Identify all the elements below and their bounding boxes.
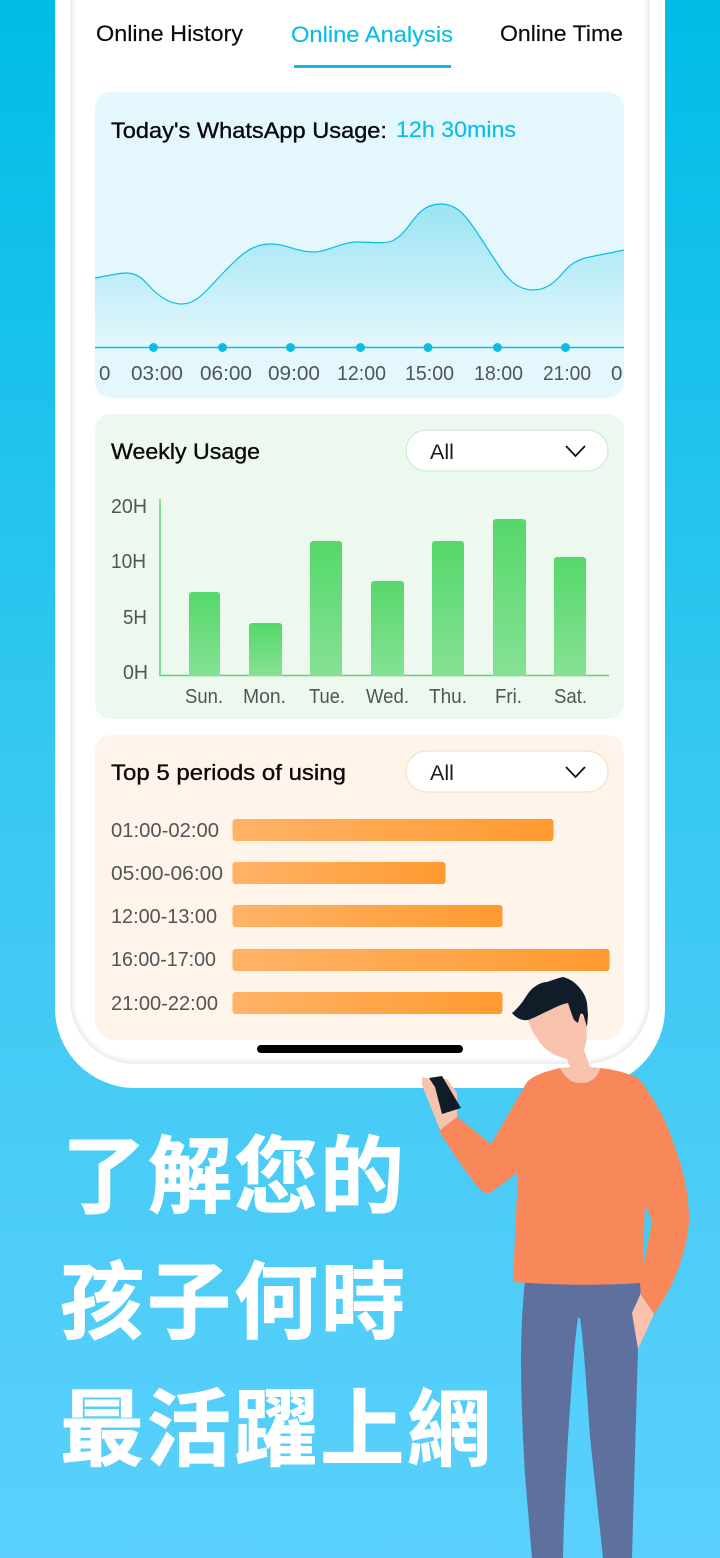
bar chart: weekly [160, 499, 609, 676]
neck and face [528, 1000, 600, 1083]
time axis labels: 06:00 [200, 362, 252, 385]
time axis labels: 15:00 [405, 362, 454, 385]
pants [521, 1280, 641, 1558]
headline [60, 1130, 491, 1477]
time axis labels: 0 [99, 362, 110, 385]
dropdown: all: All [430, 761, 454, 785]
panel: weekly usage [95, 414, 624, 719]
x axis labels: Thu. [429, 686, 467, 708]
x axis labels: Fri. [495, 686, 522, 708]
dropdown: all [406, 751, 608, 792]
y axis labels [111, 496, 148, 684]
x axis labels: Wed. [366, 686, 409, 708]
x axis labels: Mon. [243, 686, 286, 708]
sweater [439, 1068, 689, 1314]
heading: today's usage: Today's WhatsApp Usage: [111, 118, 387, 143]
headline: 了解您的 [62, 1130, 404, 1224]
home indicator [257, 1045, 463, 1053]
tab: online analysis: Online Analysis [291, 22, 453, 47]
tab: online time: Online Time [500, 21, 623, 46]
hair [512, 977, 588, 1027]
left hand [422, 1077, 457, 1130]
x axis labels [185, 686, 587, 708]
heading: top 5 periods: Top 5 periods of using [111, 760, 346, 785]
y axis labels: 10H [111, 551, 146, 573]
phone mockup [55, 0, 665, 1088]
headline: 最活躍上網 [60, 1383, 491, 1477]
x axis labels: Sun. [185, 686, 223, 708]
tab: online history: Online History [96, 21, 244, 46]
y axis labels: 0H [123, 662, 148, 684]
time axis labels: 03:00 [131, 362, 183, 385]
tabs [96, 21, 623, 68]
time axis labels: 12:00 [337, 362, 386, 385]
x axis labels: Sat. [554, 686, 587, 708]
period labels: 01:00-02:00 [111, 820, 219, 842]
time axis labels [99, 362, 622, 385]
area chart [95, 204, 624, 352]
y axis labels: 5H [123, 607, 147, 629]
panel: today's usage [95, 92, 624, 398]
y axis labels: 20H [111, 496, 147, 518]
dropdown: all: All [430, 440, 454, 464]
time axis labels: 09:00 [268, 362, 320, 385]
time axis labels: 21:00 [543, 362, 591, 385]
period labels: 12:00-13:00 [111, 906, 217, 928]
time axis labels: 18:00 [474, 362, 523, 385]
headline: 孩子何時 [60, 1256, 405, 1350]
period labels: 16:00-17:00 [111, 949, 216, 971]
period labels [111, 820, 223, 1015]
period labels: 21:00-22:00 [111, 993, 218, 1015]
right hand [632, 1293, 654, 1349]
usage value: 12h 30mins [396, 117, 516, 142]
icon: phone [429, 1076, 461, 1114]
illustration: person with phone [422, 977, 689, 1558]
heading: weekly usage: Weekly Usage [111, 439, 260, 464]
dropdown: all [406, 430, 608, 471]
time axis labels: 0 [611, 362, 622, 385]
period labels: 05:00-06:00 [111, 863, 223, 885]
panel: top 5 periods [95, 735, 624, 1040]
tab: online analysis [291, 22, 453, 68]
x axis labels: Tue. [309, 686, 345, 708]
horizontal bar chart [232, 819, 610, 1014]
arm gap [643, 1204, 652, 1269]
